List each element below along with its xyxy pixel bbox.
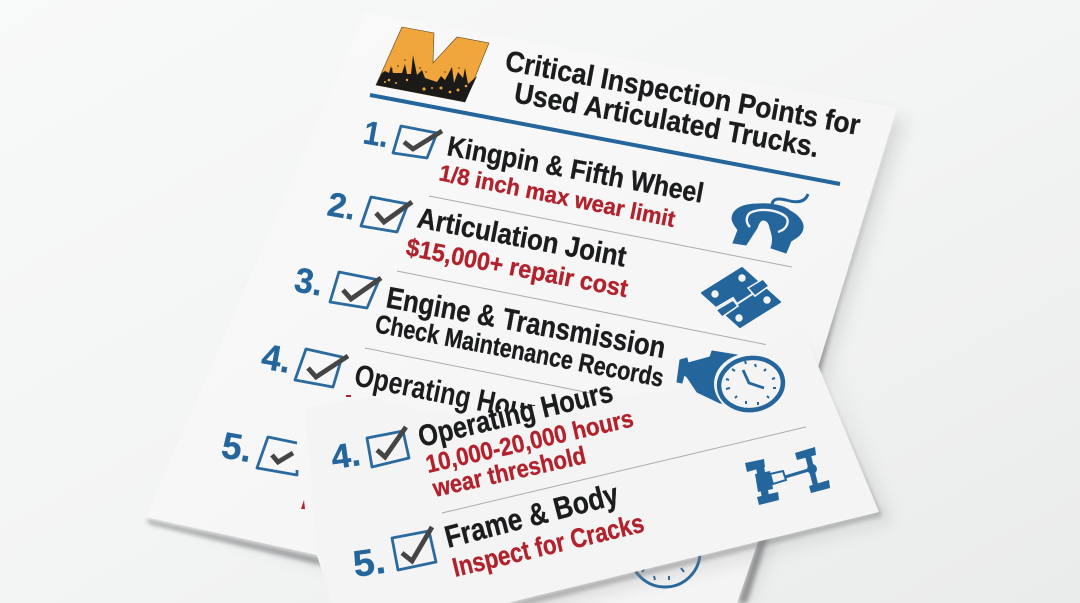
- item 2: [325, 185, 631, 303]
- front item 5: Frame & Body: [441, 476, 623, 555]
- divider: [365, 348, 590, 393]
- front card shadow: [508, 330, 892, 603]
- icon: chassis: [745, 447, 830, 505]
- title: Critical Inspection Points for: [503, 45, 863, 142]
- panel: back sheet: [146, 12, 908, 603]
- back sheet paper: [146, 12, 897, 603]
- front divider: [442, 427, 806, 513]
- item 1: Kingpin & Fifth Wheel: [445, 130, 706, 209]
- front item 4: Operating Hours: [415, 376, 616, 454]
- item 1: 1/8 inch max wear limit: [437, 159, 678, 232]
- item 5 (back): 5.: [219, 425, 255, 470]
- front item 4: 4.: [329, 435, 363, 477]
- divider: [397, 271, 768, 345]
- item 3: Engine & Transmission: [384, 281, 668, 365]
- item 4 (back): 4.: [259, 336, 294, 381]
- item 4 (back): Operating Hours: [352, 358, 552, 431]
- front item 4: wear threshold: [429, 441, 589, 503]
- icon: kingpin: [732, 194, 808, 253]
- front item 5: Inspect for Cracks: [449, 508, 647, 583]
- item 1: 1.: [361, 113, 392, 154]
- header rule: [370, 95, 840, 184]
- back sheet shadow: [146, 60, 908, 603]
- item 2: 2.: [325, 185, 359, 228]
- panel: front card: [305, 327, 892, 603]
- item 3: Check Maintenance Records: [373, 308, 666, 393]
- front item 5: [350, 476, 647, 585]
- partial clock icon on back sheet: [630, 517, 700, 587]
- front card paper: [305, 327, 879, 603]
- item 3: 3.: [292, 260, 326, 304]
- front item 4: 10,000-20,000 hours: [423, 405, 636, 479]
- item 2: Articulation Joint: [415, 202, 629, 274]
- title: Used Articulated Trucks.: [512, 77, 821, 164]
- divider: [429, 196, 792, 267]
- icon: hinge: [702, 268, 780, 327]
- item 3: [292, 260, 668, 393]
- item 2: $15,000+ repair cost: [404, 233, 631, 303]
- front item 5: 5.: [350, 540, 388, 585]
- item 4 (back): [259, 336, 552, 431]
- front item 4: [329, 376, 636, 503]
- logo: [376, 27, 489, 102]
- icon: engine and clock: [677, 351, 788, 415]
- item 5 (back): [219, 425, 305, 509]
- item 1: [361, 113, 706, 232]
